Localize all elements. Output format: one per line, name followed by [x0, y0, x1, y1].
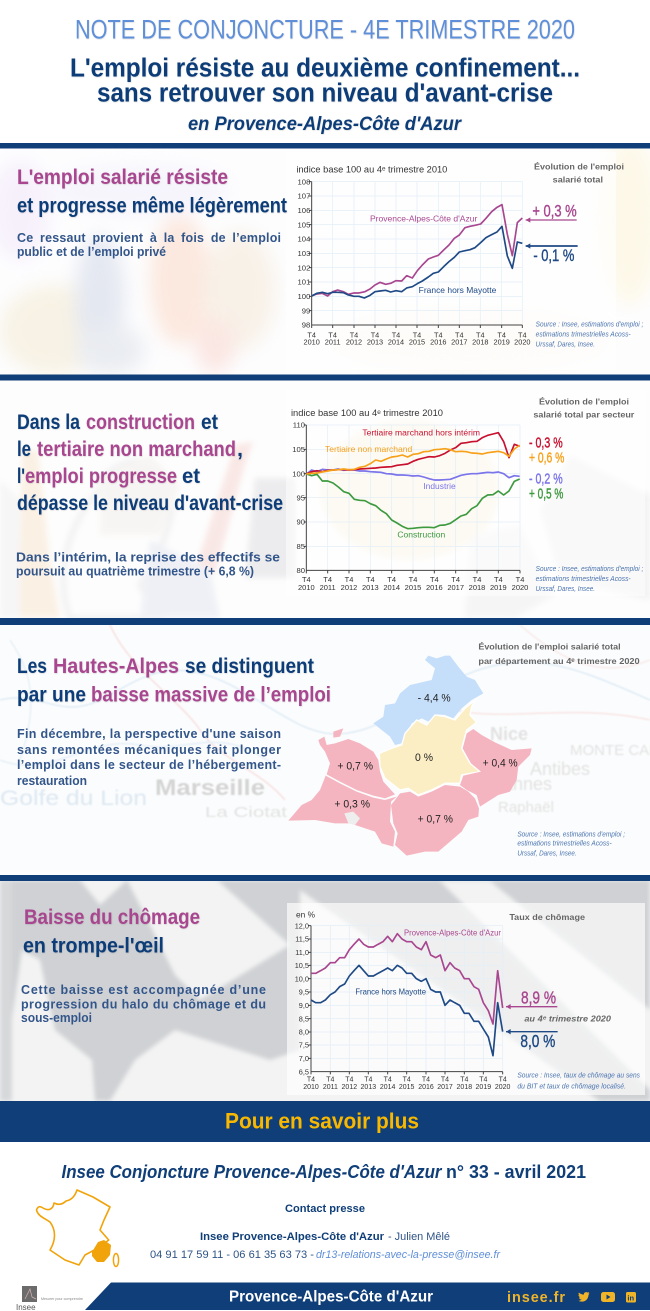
chart: emploi par secteur: Source : Insee, estimations d'emploi ; [536, 566, 643, 573]
heading: Les [17, 654, 47, 678]
chart: emploi par secteur: Industrie [423, 481, 456, 491]
icon: twitter [578, 1292, 590, 1302]
text block: Fin décembre, la perspective d'une saison [17, 727, 281, 741]
contact: dr13-relations-avec-la-presse@insee.fr [316, 1249, 501, 1261]
chart: taux de chômage: 2017 [437, 1084, 453, 1091]
chart: emploi par secteur: 110 [293, 421, 305, 430]
chart: emploi par secteur: T4 [366, 575, 375, 584]
chart: taux de chômage: 10,0 [295, 974, 309, 983]
chart: emploi salarié total: Provence-Alpes-Côte d'Azur [370, 213, 477, 223]
icon: youtube [601, 1292, 615, 1302]
chart: emploi par secteur: T4 [409, 575, 417, 584]
chart: taux de chômage: T4 [345, 1077, 354, 1084]
heading: tertiaire non marchand [37, 437, 236, 461]
subtitle: en Provence-Alpes-Côte d'Azur [188, 114, 463, 135]
chart: taux de chômage: T4 [441, 1077, 449, 1084]
chart: emploi salarié total: - 0,1 % [533, 246, 574, 265]
chart: emploi par secteur: Urssaf, Dares, Insee. [536, 586, 595, 593]
main title: L'emploi résiste au deuxième confinement... [70, 54, 580, 82]
chart: emploi par secteur: 2010 [298, 583, 315, 592]
chart: emploi salarié total: 2010 [304, 337, 320, 346]
chart: emploi salarié total: 2013 [367, 337, 383, 346]
chart: emploi salarié total: 101 [298, 278, 310, 287]
chart: taux de chômage: 6,5 [299, 1067, 309, 1076]
chart: emploi par secteur: T4 [451, 575, 460, 584]
chart: taux de chômage: 8,5 [299, 1014, 309, 1023]
main title [70, 54, 580, 108]
chart: taux de chômage: 10,5 [295, 961, 309, 970]
icon: linkedin: in [627, 1294, 634, 1302]
chart: taux de chômage: T4 [326, 1077, 335, 1084]
chart: emploi salarié total: Source : Insee, estimations d'emploi ; [536, 322, 643, 329]
chart: emploi salarié total: 2015 [409, 337, 425, 346]
panel: chômage [0, 880, 650, 1101]
chart: taux de chômage: Source : Insee, taux de chômage au sens [517, 1073, 640, 1080]
chart: emploi salarié total: Évolution de l'emploi [534, 161, 624, 171]
chart: emploi par secteur: 2019 [490, 583, 507, 592]
chart: emploi par secteur: T4 [430, 575, 439, 584]
background: road map: Golfe du Lion [0, 787, 147, 810]
heading: , [237, 437, 243, 461]
chart: emploi par secteur: + 0,5 % [529, 486, 564, 502]
Var [391, 785, 479, 856]
text block: public et de l’emploi privé [17, 245, 166, 259]
chart: taux de chômage: du BIT et taux de chômage localisé. [517, 1084, 626, 1091]
chart: emploi par secteur: 90 [296, 518, 305, 527]
heading: et progresse même légèrement [17, 194, 287, 218]
text block [16, 551, 280, 579]
chart: emploi par secteur: 2014 [383, 583, 400, 592]
chart: taux de chômage: 2016 [418, 1084, 434, 1091]
chart: taux de chômage: 12,0 [295, 921, 309, 930]
chart: emploi salarié total: 98 [302, 321, 310, 330]
chart: emploi par secteur: 2020 [512, 583, 528, 592]
text block: poursuit au quatrième trimestre (+ 6,8 %) [16, 565, 254, 579]
chart: taux de chômage: 2013 [361, 1084, 376, 1091]
map: départements: + 0,3 % [334, 799, 371, 811]
chart: emploi par secteur: 2012 [341, 583, 357, 592]
chart: taux de chômage [295, 909, 640, 1091]
chart: emploi par secteur: 100 [292, 469, 305, 478]
chart: taux de chômage: T4 [384, 1077, 392, 1084]
chart: emploi salarié total: 2016 [430, 337, 446, 346]
chart: emploi par secteur: - 0,3 % [529, 436, 563, 452]
chart: taux de chômage: Taux de chômage [509, 912, 585, 922]
logo: Insee: Mesurer pour comprendre [41, 1297, 83, 1301]
contact [150, 1203, 501, 1261]
chart: taux de chômage: au 4ᵉ trimestre 2020 [524, 1014, 611, 1024]
chart: taux de chômage: T4 [307, 1077, 315, 1084]
chart: emploi par secteur: + 0,6 % [529, 450, 565, 466]
heading: baisse massive de l’emploi [91, 683, 331, 707]
text block: Cette baisse est accompagnée d’une [21, 983, 266, 997]
map: départements [288, 642, 640, 858]
chart: emploi par secteur: T4 [302, 575, 311, 584]
chart: emploi salarié total: 99 [302, 306, 310, 315]
chart: emploi par secteur: Tertiaire marchand hors intérim [362, 428, 480, 438]
chart: emploi salarié total: indice base 100 au 4ᵉ trimestre 2010 [296, 164, 447, 174]
chart: emploi salarié total: T4 [455, 330, 464, 339]
chart: emploi salarié total: France hors Mayotte [419, 285, 497, 295]
background: road map: Raphaël [498, 799, 554, 816]
heading [17, 410, 283, 515]
chart: emploi salarié total: T4 [497, 330, 506, 339]
footer bar [85, 1282, 650, 1310]
chart: emploi par secteur: T4 [516, 575, 524, 584]
icon: France map with region highlighted [36, 1190, 119, 1266]
text block [17, 727, 281, 788]
map: départements: estimations trimestrielles Acoss- [517, 841, 612, 848]
Alpes-Maritimes [460, 729, 532, 807]
panel: emploi salarié [0, 135, 650, 375]
text block: l’emploi dans le secteur de l’hébergement- [17, 758, 281, 772]
chart: taux de chômage: 2012 [342, 1084, 357, 1091]
chart: emploi salarié total: T4 [307, 330, 316, 339]
background: road map: La Ciotat [205, 804, 288, 821]
chart: emploi salarié total: T4 [328, 330, 337, 339]
map: départements: Source : Insee, estimations d'emploi ; [517, 832, 625, 839]
panel: secteurs [0, 380, 650, 618]
contact: 04 91 17 59 11 - 06 61 35 63 73 - [150, 1249, 314, 1261]
chart: emploi salarié total: 2019 [494, 337, 510, 346]
chart: emploi salarié total: + 0,3 % [532, 202, 577, 221]
chart: emploi par secteur: T4 [323, 575, 332, 584]
chart: emploi par secteur: 2017 [447, 583, 464, 592]
chart: taux de chômage: 11,0 [295, 948, 309, 957]
text block: sans remontées mécaniques fait plonger [17, 743, 281, 757]
heading: emploi progresse [25, 464, 177, 488]
chart: taux de chômage: 7,0 [299, 1054, 309, 1063]
chart: taux de chômage: 9,5 [299, 988, 309, 997]
chart: taux de chômage: 2015 [399, 1084, 415, 1091]
background: road map: Marseille [155, 775, 265, 800]
chart: taux de chômage: 2011 [323, 1084, 338, 1091]
chart: taux de chômage: T4 [499, 1077, 507, 1084]
chart: taux de chômage: 8,0 % [520, 1031, 555, 1051]
chart: emploi salarié total: 107 [298, 192, 310, 201]
chart: emploi salarié total: salarié total [553, 174, 603, 184]
panel: départements [0, 625, 650, 875]
banner: pour en savoir plus [0, 1101, 650, 1142]
chart: taux de chômage: Provence-Alpes-Côte d'Azur [404, 928, 501, 938]
contact: Insee Provence-Alpes-Côte d'Azur [200, 1231, 385, 1243]
banner: pour en savoir plus: Pour en savoir plus [225, 1108, 419, 1134]
icon: linkedin [626, 1292, 636, 1302]
chart: emploi salarié total: 2014 [388, 337, 404, 346]
chart: taux de chômage: T4 [460, 1077, 469, 1084]
background: road map [0, 625, 650, 818]
text block: sous-emploi [21, 1011, 92, 1025]
heading: Hautes-Alpes [53, 654, 179, 678]
text block [17, 231, 281, 259]
chart: taux de chômage: T4 [479, 1077, 488, 1084]
footer bar: Provence-Alpes-Côte d'Azur [229, 1288, 433, 1306]
chart: emploi salarié total: estimations trimestrielles Acoss- [536, 332, 631, 339]
chart: taux de chômage: T4 [422, 1077, 430, 1084]
chart: emploi salarié total: 2012 [346, 337, 362, 346]
chart: emploi par secteur: - 0,2 % [529, 472, 563, 488]
map: départements: Évolution de l'emploi salarié total [478, 642, 621, 652]
chart: emploi salarié total: 108 [298, 177, 310, 186]
heading: se distinguent [185, 654, 314, 678]
text block: progression du halo du chômage et du [21, 998, 266, 1012]
background: road map: Antibes [530, 759, 590, 779]
chart: emploi par secteur: T4 [473, 575, 481, 584]
text block: restauration [17, 774, 87, 788]
chart: taux de chômage: 7,5 [299, 1041, 309, 1050]
chart: emploi par secteur: Construction [397, 529, 446, 539]
chart: emploi salarié total: 103 [298, 249, 310, 258]
chart: emploi par secteur: T4 [494, 575, 503, 584]
chart: taux de chômage: 2018 [457, 1084, 472, 1091]
map: départements: - 4,4 % [418, 693, 451, 705]
Alpes-de-Haute-Provence [379, 700, 480, 795]
Vaucluse [318, 728, 395, 798]
chart: emploi salarié total: T4 [434, 330, 443, 339]
chart: emploi salarié total: T4 [371, 330, 379, 339]
heading: et [182, 464, 200, 488]
chart: emploi par secteur: 2018 [469, 583, 485, 592]
text block [21, 983, 266, 1025]
chart: emploi salarié total: 102 [298, 263, 310, 272]
chart: emploi par secteur: 105 [292, 445, 305, 454]
heading: l' [17, 464, 25, 488]
contact: - Julien Mêlé [388, 1231, 450, 1243]
chart: emploi par secteur: 2015 [405, 583, 421, 592]
chart: taux de chômage: 2014 [380, 1084, 396, 1091]
heading: L'emploi salarié résiste [17, 165, 228, 189]
Bouches-du-Rhône [288, 776, 397, 847]
heading [23, 905, 200, 958]
chart: taux de chômage: 11,5 [295, 935, 309, 944]
chart: emploi salarié total: Urssaf, Dares, Insee. [536, 342, 595, 349]
chart: taux de chômage: France hors Mayotte [355, 986, 426, 996]
chart: emploi par secteur: estimations trimestrielles Acoss- [536, 576, 631, 583]
map: départements: 0 % [415, 752, 434, 764]
chart: taux de chômage: 8,0 [299, 1028, 309, 1037]
chart: emploi salarié total: 2011 [325, 337, 341, 346]
chart: emploi par secteur: 85 [296, 542, 305, 551]
chart: emploi salarié total: 2017 [451, 337, 467, 346]
map: départements: + 0,4 % [483, 757, 518, 769]
chart: taux de chômage: 2010 [303, 1084, 319, 1091]
chart: emploi par secteur: 2016 [426, 583, 443, 592]
chart: emploi par secteur: 80 [296, 566, 305, 575]
chart: emploi salarié total: 2018 [472, 337, 488, 346]
heading: par une [17, 683, 86, 707]
chart: taux de chômage: 8,9 % [521, 988, 556, 1008]
chart: emploi par secteur: 95 [296, 493, 305, 502]
logo: Insee [16, 1286, 83, 1311]
chart: emploi par secteur: indice base 100 au 4ᵉ trimestre 2010 [291, 408, 443, 418]
text block: Dans l’intérim, la reprise des effectifs se [16, 551, 280, 565]
chart: emploi salarié total: T4 [413, 330, 421, 339]
heading: et [201, 410, 218, 434]
chart: emploi par secteur: salarié total par secteur [533, 410, 635, 420]
chart: emploi salarié total: T4 [392, 330, 400, 339]
chart: emploi par secteur [291, 396, 643, 593]
background: road map: Nice [490, 724, 528, 744]
section divider bars [0, 143, 650, 881]
chart: emploi par secteur: 2013 [362, 583, 379, 592]
chart: emploi salarié total: 105 [298, 220, 310, 229]
main title: sans retrouver son niveau d'avant-crise [97, 80, 553, 108]
contact: Contact presse [285, 1203, 365, 1215]
chart: taux de chômage: en % [296, 909, 315, 919]
background: road map: Cannes [490, 774, 552, 794]
Hautes-Alpes [373, 656, 483, 745]
background: street shadows [0, 880, 650, 1101]
header [70, 14, 580, 135]
heading: le [17, 437, 31, 461]
heading: Baisse du chômage [24, 905, 200, 929]
background: hands and tools [4, 422, 650, 618]
chart: emploi par secteur: T4 [345, 575, 353, 584]
chart: emploi salarié total: T4 [350, 330, 358, 339]
heading [17, 654, 331, 707]
map: départements: + 0,7 % [337, 760, 374, 772]
chart: taux de chômage: 2020 [495, 1084, 511, 1091]
heading [17, 165, 287, 218]
heading: en trompe-l'œil [23, 934, 164, 958]
chart: emploi salarié total: 104 [298, 235, 311, 244]
chart: emploi par secteur: T4 [387, 575, 396, 584]
map: départements: par département au 4ᵉ trimestre 2020 [478, 656, 640, 666]
chart: taux de chômage: 2019 [476, 1084, 491, 1091]
chart: emploi salarié total: 100 [298, 292, 310, 301]
chart: emploi par secteur: Évolution de l'emploi [539, 396, 629, 406]
heading: dépasse le niveau d'avant-crise [17, 491, 283, 515]
chart: emploi salarié total: T4 [476, 330, 485, 339]
map: départements: + 0,7 % [418, 813, 454, 825]
chart: emploi salarié total: 2020 [514, 337, 530, 346]
publication reference: n° 33 - avril 2021 [446, 1162, 586, 1182]
chart: taux de chômage: T4 [364, 1077, 373, 1084]
text block: Ce ressaut provient à la fois de l’emploi [17, 231, 281, 245]
background: blurred crowd [0, 135, 650, 375]
chart: taux de chômage: T4 [403, 1077, 411, 1084]
chart: taux de chômage: 9,0 [299, 1001, 309, 1010]
chart: emploi salarié total: T4 [518, 330, 527, 339]
publication reference: Insee Conjoncture Provence-Alpes-Côte d'Azur [62, 1162, 442, 1182]
map: départements: Urssaf, Dares, Insee. [517, 851, 577, 858]
heading: construction [86, 410, 195, 434]
chart: emploi par secteur: Tertiaire non marchand [325, 444, 413, 454]
footer bar: insee.fr [507, 1290, 565, 1306]
chart: emploi salarié total: 106 [298, 206, 310, 215]
chart: emploi par secteur: 2011 [320, 583, 336, 592]
heading: Dans la [17, 410, 81, 434]
chart: emploi salarié total [296, 161, 643, 349]
